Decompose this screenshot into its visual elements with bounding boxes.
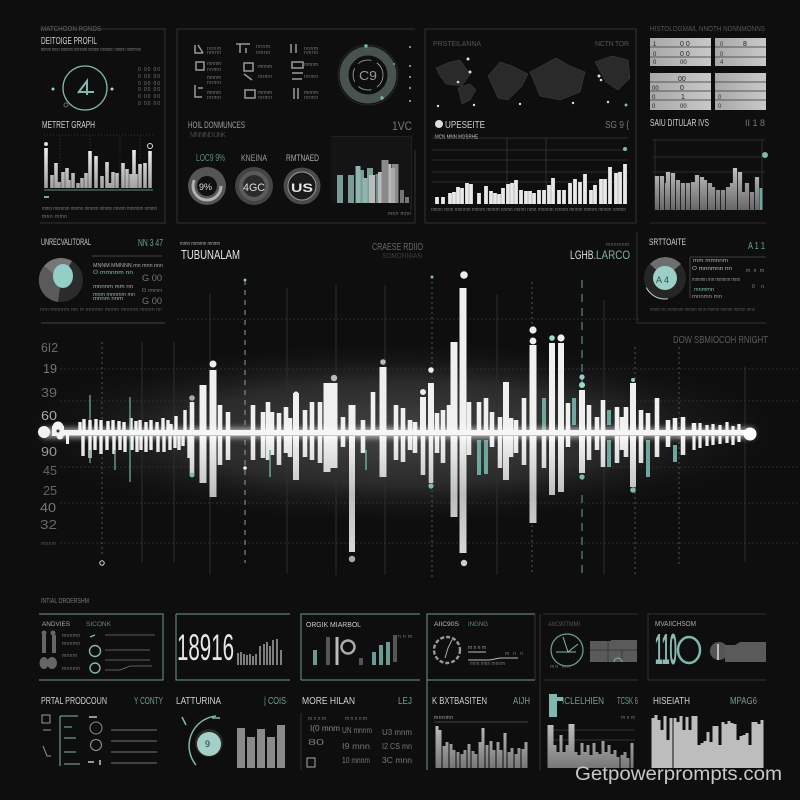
panel: distribution donut left: mnm mnnmm mn [93,292,135,298]
value: 1VC: 1VC [392,119,412,133]
panel: bottom D: mnn mnn mnnm [470,661,505,667]
chart content [315,642,388,665]
panel: distribution donut left: mnnm nnm [93,296,123,302]
entries: UN mnnm [342,726,372,735]
left blob [38,422,69,444]
table one [650,38,711,66]
panel: icon grid and donuts: nnnm [304,46,318,52]
bar chart: sales [650,140,768,223]
heading: UNRECVALITORAL [41,237,91,247]
panel: distribution donut right: 0 n [752,284,764,290]
caption: MCN MNN MGSRHE [435,135,478,141]
table three: 00 [652,86,659,92]
heading: right: LGHB. [570,248,596,262]
heading: AIIC90S [434,622,459,628]
panel: bottom E: mn mn [550,664,570,670]
table three: 1 [681,94,685,101]
panel: bottom D: INGNG [468,622,488,628]
panel: bottom L histogram [653,696,762,768]
panel: icon grid and donuts: nmnn [207,50,221,56]
axis labels [40,340,58,547]
panel: tables [650,26,768,223]
bar chart: metric: mmn mnnmm mnmn mmnm nmmn mnnm mmnnm nmmn [42,206,157,212]
heading: K BXTBASITEN [432,696,487,707]
watermark: Getpowerprompts.com [575,764,782,785]
panel: distribution donut left: G 00 [142,273,162,283]
table three: 00 [678,76,686,83]
bar chart: timeline: nmnn mnn mnnnm mnnm mnnm nnmn nnnm nmn mnnnm nmnm mnnm nmnm mnnm nmmn [431,207,626,213]
panel: distribution donut left [39,237,165,323]
panel: distribution donut right: mm mmnnm [693,258,728,264]
panel: bottom K icon [548,694,638,768]
panel: bottom F [648,614,766,680]
heading: mono ...: HOIL DONMUNCES [188,120,245,130]
panel: icon grid and donuts: KNEINA [241,153,267,163]
icon: teal ring gauge [52,66,114,110]
text list [690,257,766,298]
section caption: INTIAL ORDERSHM [41,598,89,605]
table three: 0 [652,104,656,110]
panel: icon grid and donuts: nnnm [256,44,270,50]
panel: distribution donut right: O mnnmnn nn [692,266,732,272]
heading: chart note: DOW SBMIOCOH RNIGHT [673,335,768,346]
axis labels: 60 [41,408,57,423]
entries: 10 mnnm [342,756,370,765]
panel: bottom H latturina [176,696,286,768]
chart box: teal and grey columns [331,137,411,217]
donut chart: A 4 [656,275,669,285]
panel: distribution donut right: nmnn nn mmnnm mnnm mnn mnmn mnnm mmnn mnn [650,307,755,313]
panel: distribution donut right: mnmmn [694,287,714,293]
panel: bottom F: 110 [655,625,677,674]
panel: icon grid and donuts: mnnm [304,62,318,68]
table three: 0 [680,85,684,92]
panel: icon grid and donuts: nnmn [304,95,318,101]
panel: icon grid and donuts: mnnm [207,90,221,96]
panel: icon grid and donuts: nnmn [207,80,221,86]
donut: one [188,167,226,205]
status: | COIS [264,696,286,707]
donut: two [235,167,273,205]
panel: icon grid and donuts: mnnm [258,90,272,96]
panel: profile gauge and bars: 0 00 00 [138,87,160,93]
chart caption: mnnmn [434,715,453,721]
panel: bottom A: mnnmn [62,633,80,639]
table one: 0 0 [680,41,690,48]
panel: icon grid and donuts: mnnm [207,75,221,81]
heading: center [372,242,423,260]
entries: I(0 mnm [310,724,340,733]
dial [434,637,460,663]
table three: 00 [680,104,687,110]
teal accent bars [90,395,675,482]
heading: center: CRAESE RDIIO [372,242,423,253]
donut: three [284,168,320,204]
panel: icon grid and donuts: nnmn [258,95,272,101]
table three: 0 [652,95,656,101]
axis labels: 19 [43,361,57,376]
entries: 80 [308,738,325,747]
table four: 0 [718,104,722,110]
table four: 0 [718,95,722,101]
table one: 0 [653,60,657,66]
right end node [744,428,756,440]
table two: 0 [720,42,724,48]
panel: bottom A: SICONK [86,622,111,628]
heading: PRTAL PRODCOUN [41,696,107,707]
table two [715,38,766,66]
table one: 0 0 [680,51,690,58]
waveform marker dots [100,271,636,566]
upper bars [80,288,739,432]
status: LEJ [398,696,412,707]
panel: icon grid and donuts: nmnn [304,50,318,56]
table one: 00 [680,60,687,66]
table two: 0 [720,52,724,58]
donut gauge [338,44,398,105]
heading: MVAIICHSOM [655,621,696,628]
big number: 18916 [177,627,234,668]
panel: profile gauge and bars [40,26,165,223]
panel: bottom A [39,614,163,680]
block [710,642,728,660]
panel: distribution donut left: mnnnm mm nn [93,284,133,290]
panel: distribution donut right: mnnmn mn [692,294,722,300]
heading: sales: SAIU DITULAR IVS [650,118,709,129]
panel: profile gauge and bars: 0 00 00 [138,81,160,87]
axis labels: 90 [41,444,57,459]
panel: distribution donut left: G 00 [142,296,162,306]
entries: U3 mnm [382,728,412,737]
heading: ICLELHIEN [562,696,604,707]
panel: icon grid and donuts: nnmn [207,67,221,73]
status: AIJH [513,696,530,707]
heading: tubunalam: mmn mnnmn mnmn [180,241,220,247]
axis labels: 45 [43,463,57,478]
map shapes [436,56,630,104]
heading: profile: DEITOIGE PROFIL [41,36,97,47]
small caption: MATCHOON RONDS [41,26,101,33]
status: SG 9 { [605,120,630,131]
panel: distribution donut left: nnn mmnnm mn m mnnmn mnmn mnnmn mnnm nn [40,307,162,313]
status: Y CONTY [134,696,163,707]
panel: bottom J extraction [432,696,530,768]
icon [549,694,563,717]
heading: map: PRSTEILANNA [433,41,481,48]
panel: distribution donut right [637,232,766,323]
axis labels: 40 [40,500,56,515]
waveform chart [38,271,756,566]
heading: LATTURINA [176,696,221,707]
panel: bottom C: nnm [398,634,412,640]
gauge [182,716,220,765]
panel: bottom A: mnnmn [62,641,80,647]
table three [650,73,711,110]
icons [40,630,57,669]
dial [551,634,583,666]
legend list: 0 00 00 [138,67,160,73]
chart box: teal and grey columns: mnn mnn [388,211,411,217]
bar chart [437,726,526,768]
panel: world map [425,29,636,223]
axis labels: 32 [40,517,57,532]
axis labels: 39 [41,385,57,400]
status: A 1 1 [748,241,765,252]
panel: profile gauge and bars: 0 00 00 [138,101,160,107]
status: MPAG6 [730,696,757,707]
panel: bottom B [176,614,290,680]
axis labels: mnnm [41,541,56,547]
panel: icon grid and donuts: mnnm [304,90,318,96]
heading: right: LARCO [596,248,630,262]
bar chart: timeline [431,137,628,213]
panel: profile gauge and bars: 0 00 00 [138,94,160,100]
entries [308,716,412,765]
panel: distribution donut left: MNNM MMNNN mn mnn nnn [93,263,163,269]
icon: badge [435,120,443,128]
center glow [42,428,754,438]
panel: icon grid and donuts: MNNIND LINK [190,132,226,139]
panel: distribution donut left: O mmnnm nn [93,270,133,276]
donut gauge: C9 [359,68,377,83]
bar chart [548,730,635,740]
panel: icon grid and donuts [177,29,415,223]
panel: bottom I more [301,696,412,770]
table one: 0 [653,52,657,58]
panel: profile gauge and bars: 0 00 00 [138,74,160,80]
panel: distribution donut right: mnnmn mn mmnnn mnn [692,277,740,283]
panel: icon grid and donuts: mnnm [207,61,221,67]
donut: three: US [291,181,313,195]
bars [241,725,281,768]
heading: HISEIATH [653,696,690,707]
entries: I9 mnn [342,742,370,751]
table two: 8 [743,41,747,48]
panel: world map: NCTN TOR [595,41,629,48]
heading: MORE HILAN [302,696,355,707]
status: NN 3 47 [138,238,163,249]
heading: ORGIK MIARBOL [306,622,361,629]
panel: bottom A: mnnmn [62,666,80,672]
center line [60,430,754,436]
bar chart [653,715,762,768]
entries: 3C mnn [382,756,412,765]
heading: right: mnnmnm [606,242,629,248]
entries: mnnnm [345,716,367,722]
heading: metric graph: METRET GRAPH [42,120,95,131]
heading: updates: UPESEITE [445,120,485,131]
panel: bottom D [427,614,535,770]
lower bars [83,436,739,553]
status: II 1 8 [745,118,765,128]
axis labels: 25 [43,483,57,498]
panel: bottom D: mnn [505,651,523,657]
block [590,640,637,662]
panel: bottom E [540,614,638,770]
heading: AIIC90TMMI [548,622,580,628]
panel: icon grid and donuts: nnmn [207,95,221,101]
entries: I2 CS mn [382,742,412,751]
heading: ANDVIES [42,622,70,628]
panel: icon grid and donuts: RMTNAED [286,153,319,163]
donut: one: 9% [199,182,212,192]
heading: SRTTOAITE [649,237,686,247]
heading: tubunalam: TUBUNALAM [181,247,240,262]
table four [715,73,766,110]
panel: icon grid and donuts: nmnn [256,50,270,56]
panel: icon grid and donuts: nnmn [304,74,318,80]
table one: 1 [653,42,657,48]
heading: right [570,242,630,262]
panel: icon grid and donuts: mnnm [258,64,272,70]
entries: mnnm [308,716,326,722]
panel: distribution donut left: 0 mnn [142,288,162,294]
lines [468,652,518,660]
heading: tubunalam [180,241,240,262]
mini bars [238,639,281,665]
panel: distribution donut right: mnm [746,268,764,274]
donut chart [39,258,83,302]
text list [92,255,162,257]
side dots [409,46,411,102]
bar chart: metric [42,135,157,220]
ring [678,637,700,663]
icon grid [195,44,303,99]
panel: bottom D: mnnm [468,645,486,651]
donut labels: LOC9 9% [196,153,225,164]
table two: 4 [720,60,724,66]
donut: two: 4GC [243,182,265,194]
heading: center: SOMONNIAN [382,253,422,260]
panel: bottom C [301,614,420,680]
axis labels: 6I2 [41,340,58,355]
panel: bottom A: mnnm [62,653,77,659]
status: TCSK 6 [617,696,638,707]
bar chart: metric: mnn mmn [42,214,67,220]
panel: bottom G portal [41,696,163,766]
panel: icon grid and donuts: nnnm [207,46,221,52]
grid: waveform axes [60,277,800,577]
panel: bottom H latturina: 9 [205,739,210,749]
panel: icon grid and donuts: nnmn [258,74,272,80]
caption: HISTOLOGMAIL NNOTH NDNNMONNS [650,26,765,33]
panel: profile gauge and bars: mmm mnn mmmn nnnmm mnmn mnnmn nmmn mmmnn [41,47,141,53]
panel: bottom K icon: mnm [621,715,635,721]
